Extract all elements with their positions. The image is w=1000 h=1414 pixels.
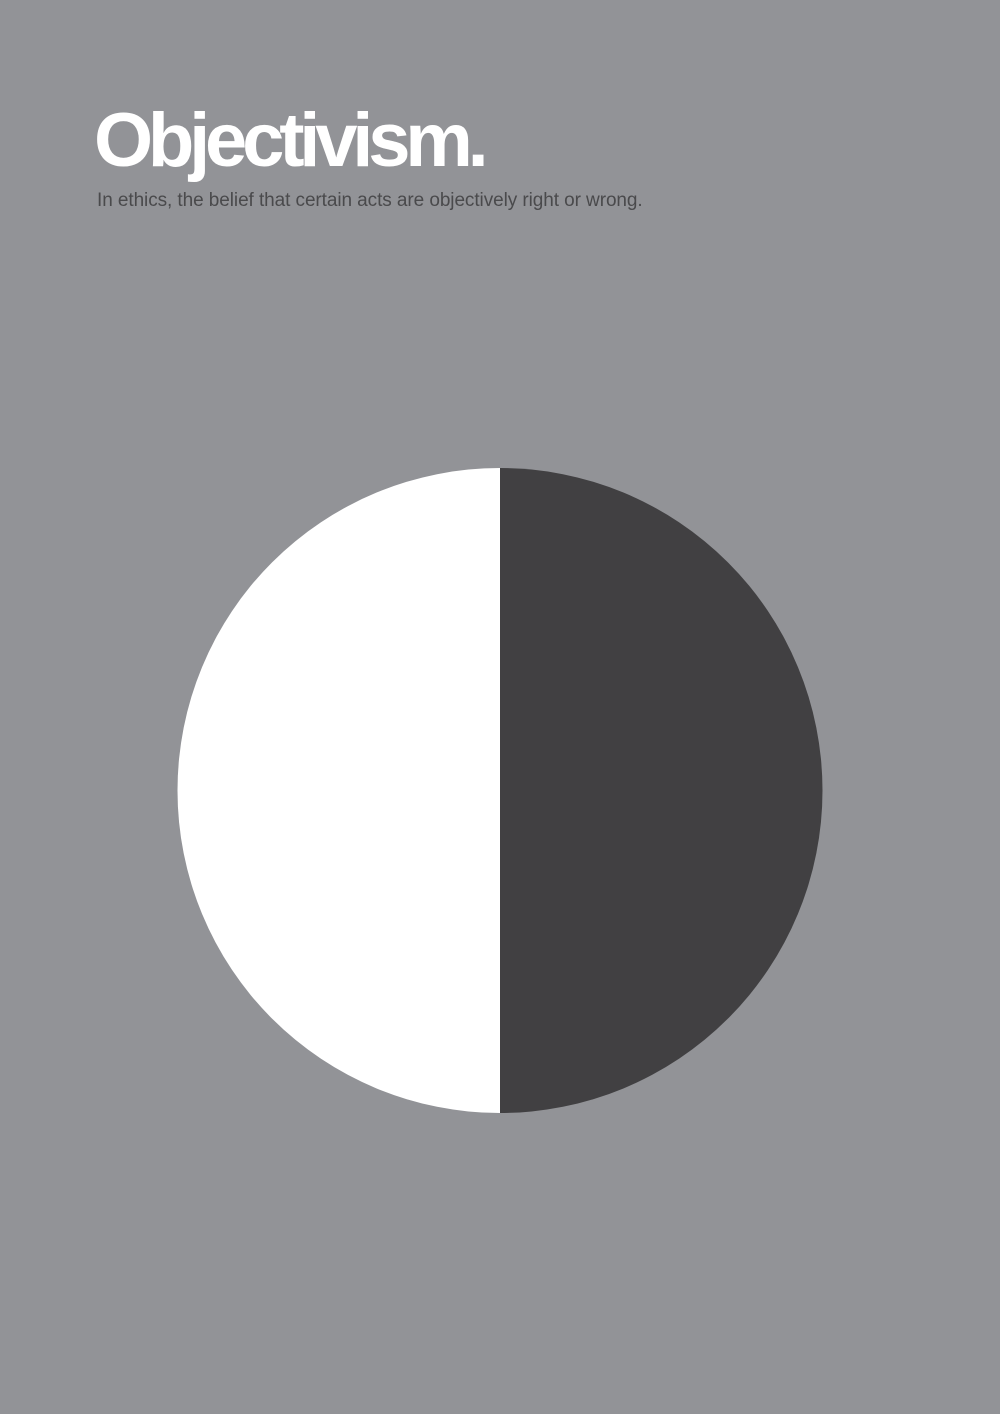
- subtitle text: In ethics, the belief that certain acts are objectively right or wrong.: [97, 190, 643, 211]
- title: Objectivism.: [94, 98, 484, 183]
